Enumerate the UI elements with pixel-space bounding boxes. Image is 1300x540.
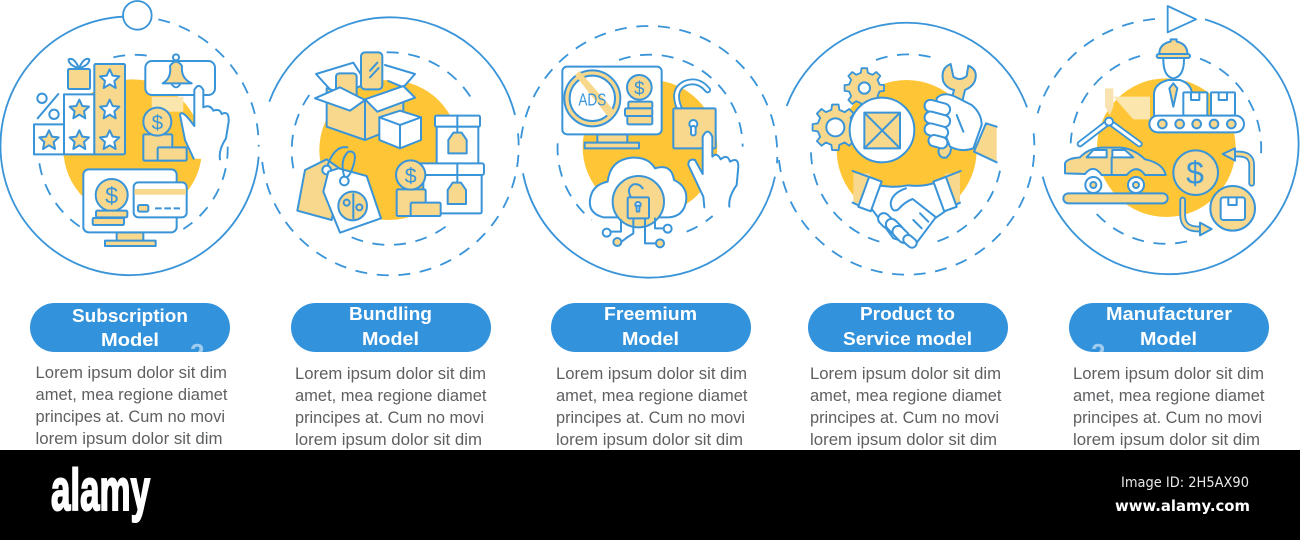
pill: manufacturer model [1069, 303, 1269, 352]
pill: product to service model: Service model [843, 328, 972, 349]
text: product to service description: principes at. Cum no movi [810, 409, 999, 427]
text: product to service description: lorem ipsum dolor sit dim [810, 431, 997, 449]
text: manufacturer description: lorem ipsum dolor sit dim [1073, 431, 1260, 449]
icon: coins and pointing hand: $ [152, 111, 164, 134]
text: product to service description [810, 365, 1002, 449]
text: subscription description: principes at. Cum no movi [36, 408, 225, 426]
icon: money and product cycle [1173, 148, 1255, 235]
icon: stacked gift boxes with tags [396, 116, 484, 216]
text: freemium description: Lorem ipsum dolor sit dim [556, 365, 747, 383]
text: subscription description [36, 364, 228, 448]
icon: notification bell [145, 54, 215, 112]
panel: subscription model illustration [0, 1, 259, 275]
panel: manufacturer model illustration [1038, 6, 1299, 274]
icon: small cube [379, 111, 421, 148]
icon: open box with phones [315, 52, 415, 140]
icon: coins and pointing hand [143, 86, 229, 161]
text: bundling description: amet, mea regione diamet [295, 387, 487, 405]
pill: manufacturer model: Manufacturer [1106, 303, 1232, 324]
text: subscription description: amet, mea regione diamet [36, 386, 228, 404]
icon: crane lifting car [1063, 88, 1168, 203]
pill: bundling model: Bundling [349, 303, 432, 324]
text: bundling description: lorem ipsum dolor sit dim [295, 431, 482, 449]
text: manufacturer description: amet, mea regione diamet [1073, 387, 1265, 405]
text: freemium description: lorem ipsum dolor sit dim [556, 431, 743, 449]
text: product to service description: Lorem ipsum dolor sit dim [810, 365, 1001, 383]
text: bundling description [295, 365, 487, 449]
icon: worker on conveyor [1149, 39, 1244, 132]
icon: monitor with payment card: $ [105, 183, 118, 209]
pill: bundling model: Model [362, 328, 419, 349]
text: freemium description [556, 365, 748, 449]
pill: freemium model: Freemium [604, 303, 697, 324]
pill: manufacturer model: Model [1140, 328, 1197, 349]
marker: start circle [123, 1, 152, 30]
footer bar: alamy watermark [0, 450, 1300, 540]
text: subscription description: lorem ipsum dolor sit dim [36, 430, 222, 448]
pill: subscription model: Model [101, 329, 159, 350]
icon: monitor with no ads sign: ADS [578, 89, 606, 109]
marker: end triangle [1168, 6, 1196, 32]
text: product to service description: amet, mea regione diamet [810, 387, 1002, 405]
pill: manufacturer model: 2 [1091, 338, 1105, 368]
icon: handshake [853, 171, 961, 250]
pill: subscription model: Subscription [72, 305, 188, 326]
pill: subscription model: 2 [190, 338, 204, 368]
footer bar: alamy watermark: alamy [51, 458, 150, 523]
icon: open padlock and hand [673, 82, 738, 207]
text: manufacturer description: Lorem ipsum dolor sit dim [1073, 365, 1264, 383]
icon: hand holding wrench [923, 64, 997, 162]
pill: product to service model [808, 303, 1008, 352]
text: freemium description: amet, mea regione diamet [556, 387, 748, 405]
pill: product to service model: Product to [860, 303, 955, 324]
panel: bundling model illustration [262, 17, 519, 275]
icon: rating stars and gift [34, 59, 125, 154]
text: subscription description: Lorem ipsum dolor sit dim [36, 364, 227, 382]
footer bar: alamy watermark: Image ID: 2H5AX90 [1121, 475, 1249, 491]
icon: monitor with no ads sign: $ [634, 78, 645, 99]
icon: monitor with no ads sign [562, 67, 662, 148]
pill: freemium model: Model [622, 328, 679, 349]
pill: freemium model [551, 303, 751, 352]
panel: product to service model illustration [779, 23, 1034, 275]
text: manufacturer description [1073, 365, 1265, 449]
icon: money and product cycle: $ [1186, 155, 1204, 191]
panel: freemium model illustration [521, 26, 777, 278]
icon: monitor with payment card [83, 169, 187, 246]
footer bar: alamy watermark: www.alamy.com [1115, 497, 1250, 515]
text: manufacturer description: principes at. Cum no movi [1073, 409, 1262, 427]
icon: cloud with lock and circuit [590, 158, 686, 247]
icon: discount price tags [297, 147, 381, 233]
text: bundling description: principes at. Cum no movi [295, 409, 484, 427]
pill: bundling model [291, 303, 491, 352]
pill: subscription model [30, 303, 230, 352]
icon: gears and product box [813, 68, 914, 162]
text: freemium description: principes at. Cum no movi [556, 409, 745, 427]
text: bundling description: Lorem ipsum dolor sit dim [295, 365, 486, 383]
icon: stacked gift boxes with tags: $ [405, 164, 417, 188]
